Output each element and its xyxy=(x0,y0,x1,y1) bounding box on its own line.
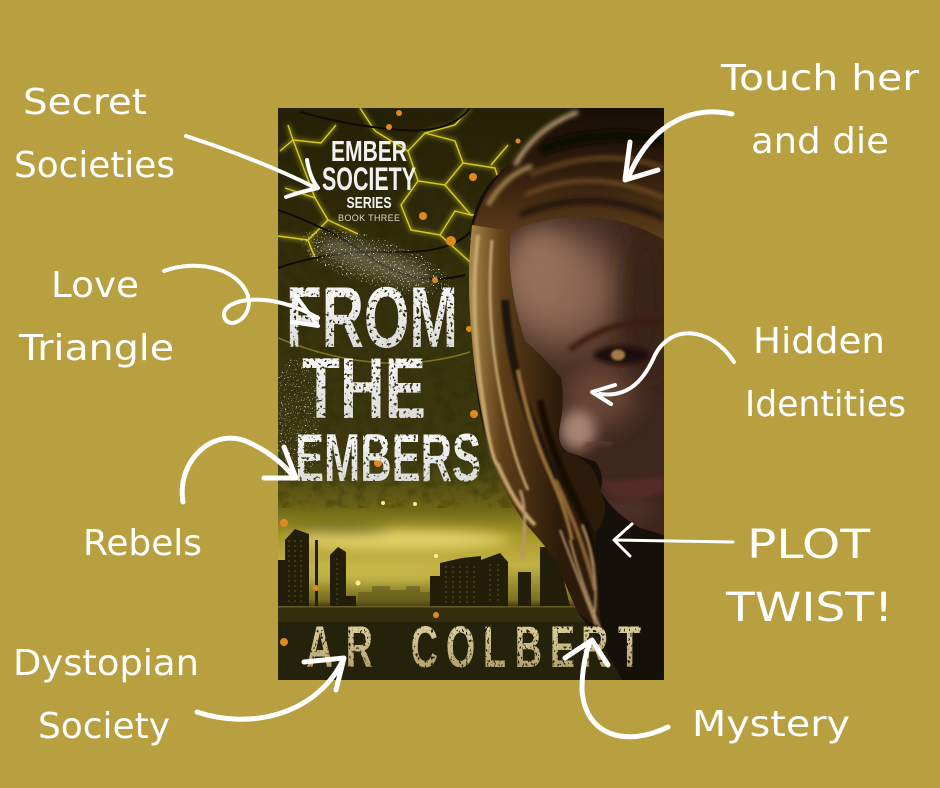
label: Love Triangle: Love xyxy=(51,265,139,306)
book title: EMBERS xyxy=(295,420,481,496)
label: Secret Societies: Societies xyxy=(14,145,175,186)
dust cloud xyxy=(315,234,434,290)
author: AR xyxy=(306,616,373,680)
model: hair top xyxy=(470,108,664,245)
book title: THE xyxy=(302,341,426,437)
label: Hidden Identities xyxy=(745,321,906,425)
label: Love Triangle xyxy=(18,265,174,369)
label: Dystopian Society: Dystopian xyxy=(13,643,199,684)
series title: SERIES xyxy=(346,195,392,212)
arrow: Rebels xyxy=(182,438,296,502)
hexagon pattern xyxy=(278,108,508,264)
barbed wire xyxy=(278,108,470,363)
label: PLOT TWIST!: TWIST! xyxy=(725,585,893,631)
label: Hidden Identities: Identities xyxy=(745,384,906,425)
label: Love Triangle: Triangle xyxy=(18,328,174,369)
author xyxy=(307,626,641,668)
city skyline xyxy=(278,529,570,606)
label: Secret Societies xyxy=(14,82,175,186)
arrow: Love Triangle xyxy=(164,266,318,326)
arrows xyxy=(164,112,734,737)
series title: BOOK THREE xyxy=(338,213,400,223)
label: Rebels: Rebels xyxy=(83,523,202,564)
sky cloud streaks xyxy=(290,526,510,583)
book cover xyxy=(270,108,670,680)
label: Dystopian Society xyxy=(13,643,199,747)
arrow: Hidden Identities xyxy=(592,333,734,404)
label: Touch her and die: and die xyxy=(751,121,889,162)
arrow: Touch her xyxy=(625,112,732,180)
arrow: Secret Societies xyxy=(186,136,318,197)
author: COLBERT xyxy=(411,616,641,680)
label: Dystopian Society: Society xyxy=(38,706,170,747)
label: Touch her and die: Touch her xyxy=(720,58,919,99)
series title xyxy=(322,136,416,223)
ground band xyxy=(278,606,664,622)
label: PLOT TWIST! xyxy=(725,522,893,631)
model: black backdrop xyxy=(470,108,664,680)
book title: FROM xyxy=(286,270,458,366)
label: Hidden Identities: Hidden xyxy=(753,321,885,362)
embers xyxy=(280,110,520,646)
series title: SOCIETY xyxy=(322,161,416,197)
arrow: PLOT TWIST xyxy=(614,524,733,556)
book title xyxy=(290,286,480,482)
model: face xyxy=(510,218,664,535)
label: Mystery: Mystery xyxy=(692,704,850,745)
model: hair left xyxy=(469,225,605,630)
label: Secret Societies: Secret xyxy=(23,82,147,123)
label: PLOT TWIST!: PLOT xyxy=(747,522,871,568)
arrow: Dystopian Society xyxy=(197,658,344,719)
series title: EMBER xyxy=(331,136,407,168)
arrow: Mystery xyxy=(565,640,668,737)
label: Touch her and die xyxy=(720,58,919,162)
